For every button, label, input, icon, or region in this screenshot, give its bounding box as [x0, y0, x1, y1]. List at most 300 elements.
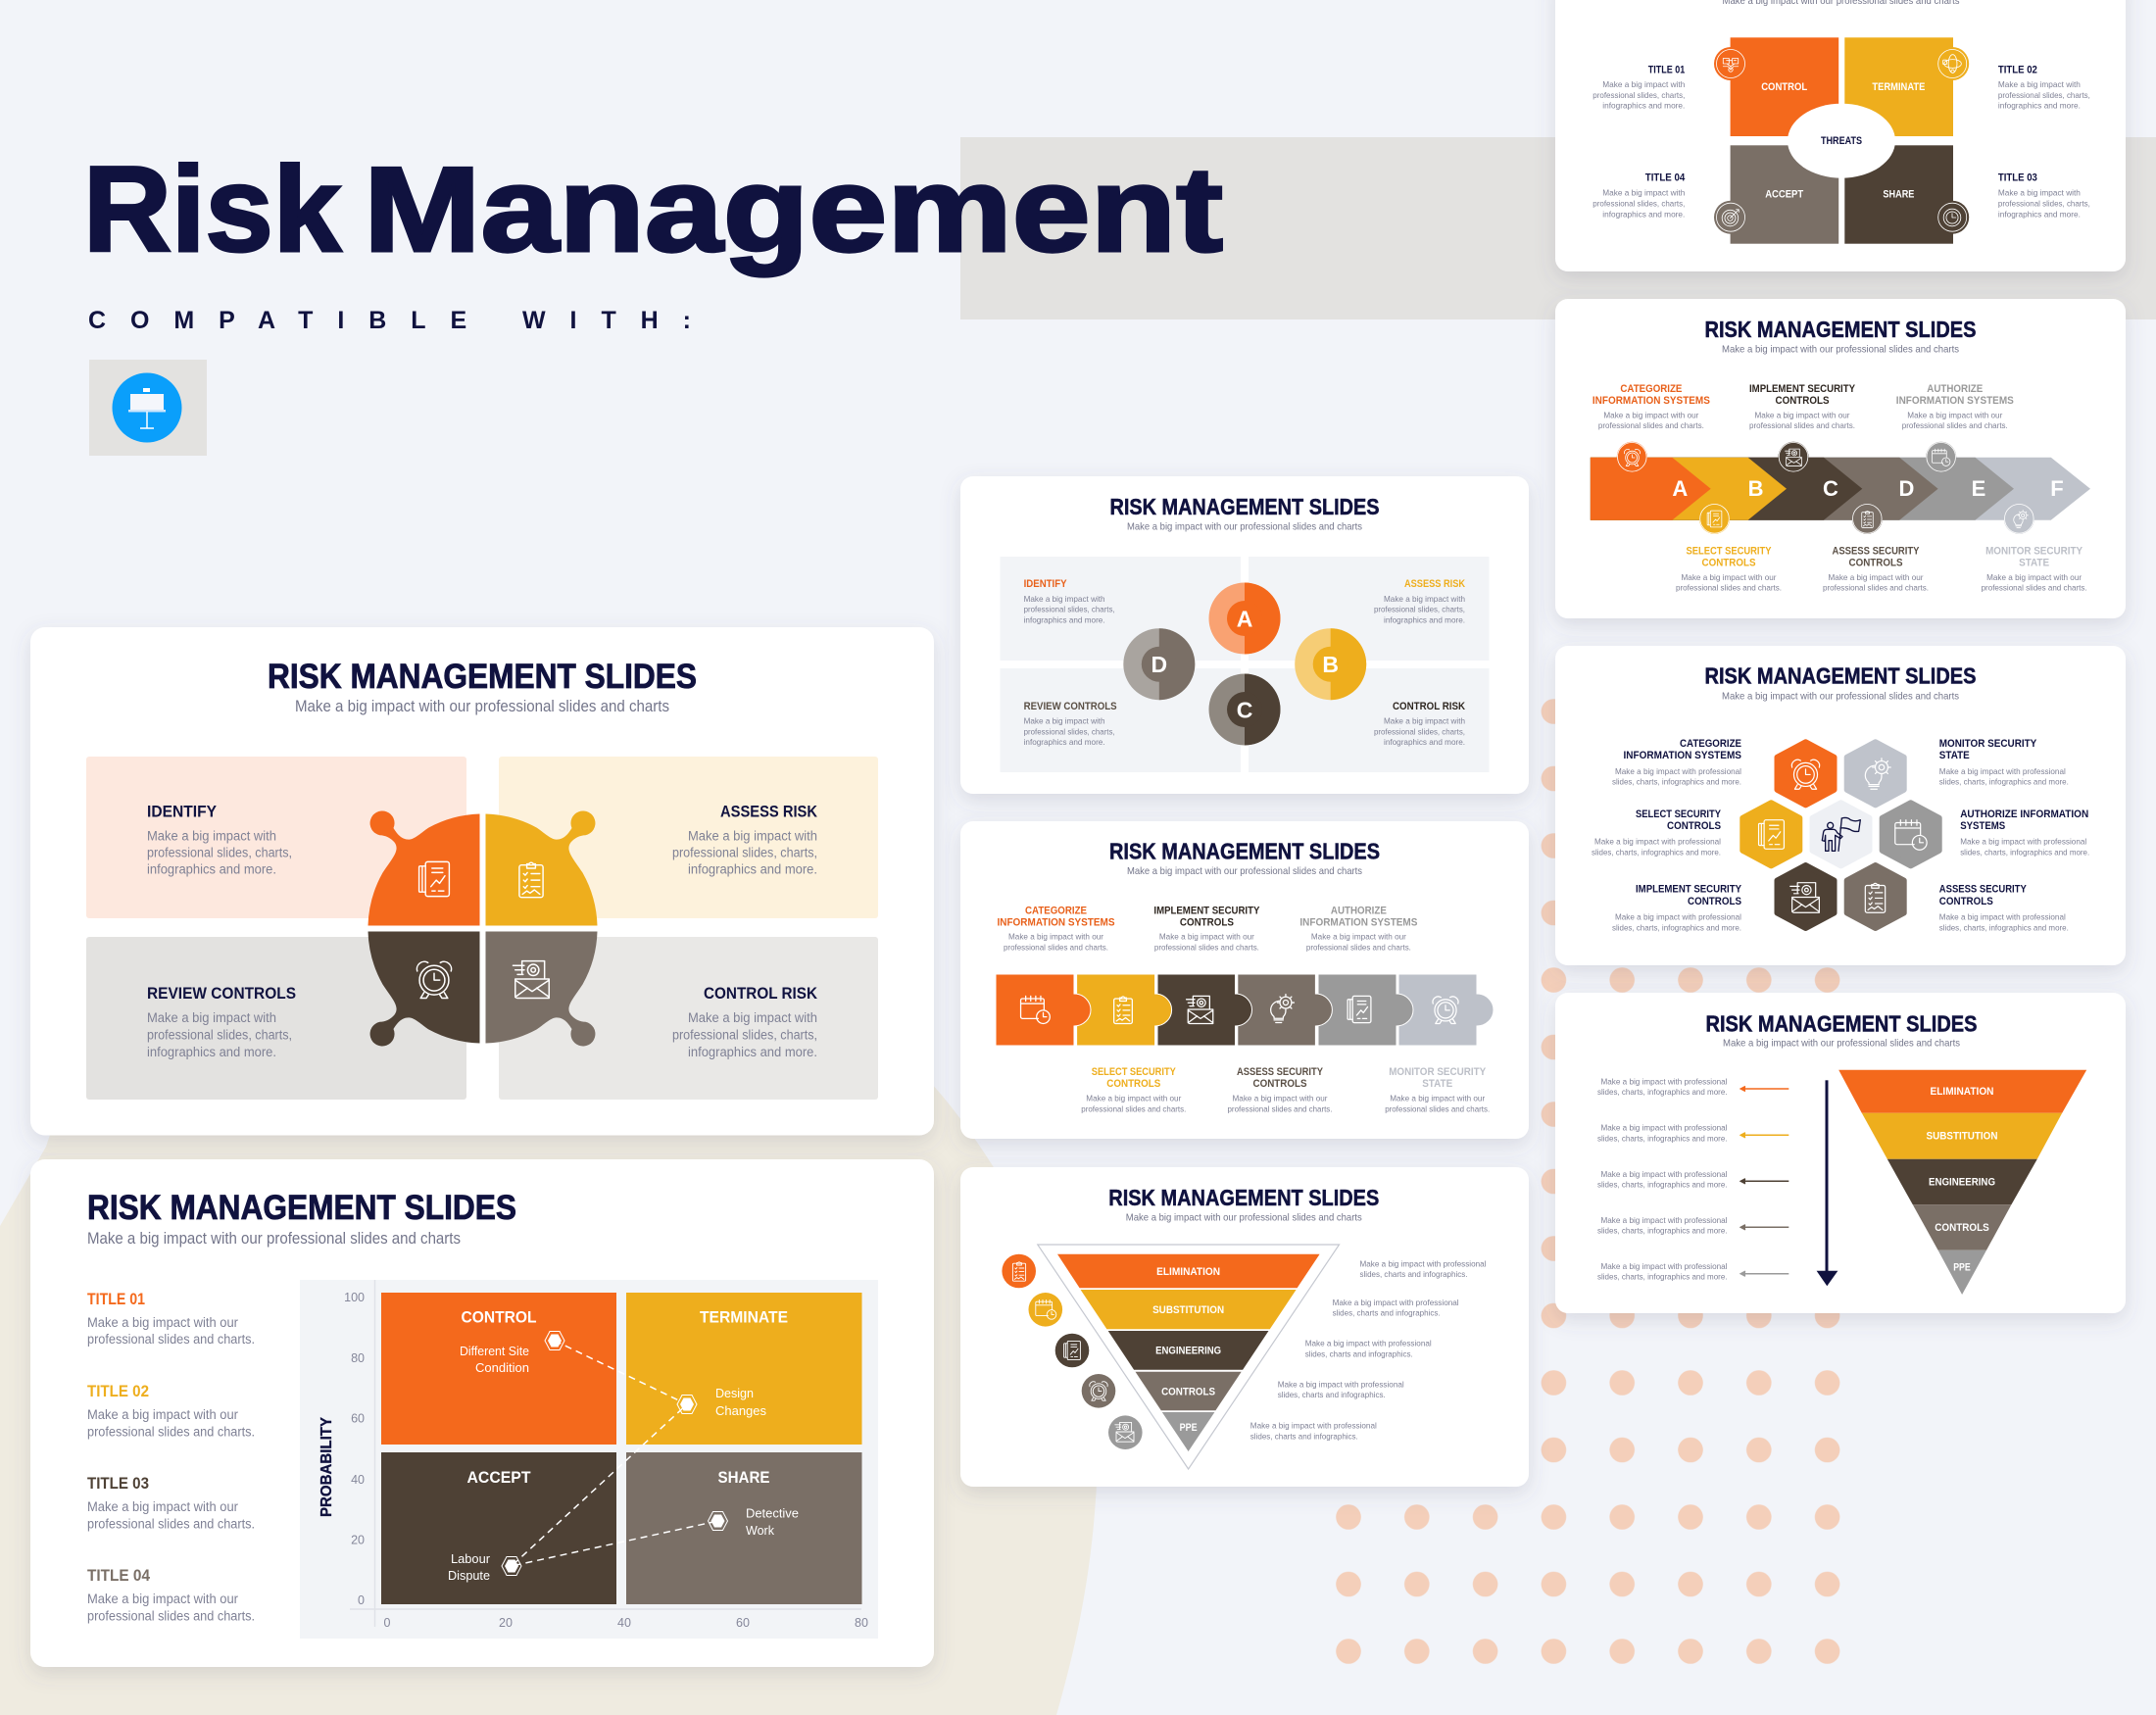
side text 1 with arrow: Make a big impact with professional	[1601, 1076, 1728, 1086]
side text 1 with arrow: slides, charts, infographics and more.	[1597, 1087, 1727, 1097]
icon: globe badge	[1936, 47, 1969, 80]
side text 1 with arrow	[1597, 1076, 1788, 1097]
step text: categorize: Make a big impact with our	[1008, 932, 1103, 942]
step text: categorize: CATEGORIZE	[1025, 905, 1087, 916]
box: identify	[86, 757, 466, 918]
side text 1: slides, charts and infographics.	[1360, 1269, 1468, 1279]
step text: monitor: professional slides and charts.	[1982, 583, 2087, 593]
chevron arrow chain: E	[1972, 476, 1985, 501]
chart: probability matrix	[300, 1280, 878, 1639]
step text: assess: CONTROLS	[1252, 1078, 1307, 1090]
side text 5: Make a big impact with professional	[1250, 1421, 1377, 1431]
text block: select: SELECT SECURITY	[1636, 808, 1722, 820]
text block: title 01: Make a big impact with	[1602, 79, 1686, 89]
card background	[960, 476, 1529, 794]
threats diagram: ACCEPT	[1765, 189, 1803, 201]
step text: select: Make a big impact with our	[1682, 572, 1777, 582]
text block: title 04	[1592, 172, 1686, 219]
icon: calendar badge	[1926, 442, 1956, 472]
list item: title 04: professional slides and charts.	[87, 1609, 255, 1623]
text block: assess risk: professional slides, charts,	[672, 845, 817, 860]
step text: monitor: STATE	[1422, 1078, 1452, 1090]
step text: categorize: INFORMATION SYSTEMS	[1592, 395, 1710, 407]
step text: authorize: Make a big impact with our	[1907, 410, 2002, 419]
box: review controls	[86, 937, 466, 1100]
list item: title 02	[87, 1382, 255, 1439]
icon: clipboard badge	[1852, 504, 1883, 534]
step text: categorize: Make a big impact with our	[1603, 410, 1699, 419]
circle A: A	[1237, 606, 1252, 631]
text block: review controls: professional slides, charts,	[147, 1027, 292, 1043]
step text: implement	[1153, 905, 1260, 952]
main title	[83, 143, 1223, 277]
step text: assess: Make a big impact with our	[1829, 572, 1924, 582]
step text: implement: CONTROLS	[1776, 395, 1829, 407]
panel: quadrant risk process	[30, 627, 934, 1135]
text block: title 02: professional slides, charts,	[1998, 90, 2090, 100]
step text: monitor: professional slides and charts.	[1385, 1103, 1490, 1113]
step text: categorize: CATEGORIZE	[1620, 383, 1682, 395]
step text: categorize: professional slides and charts.	[1598, 420, 1704, 430]
text block: control risk: Make a big impact with	[688, 1010, 817, 1025]
chart: probability matrix: 0	[358, 1593, 365, 1607]
text block: title 02: TITLE 02	[1998, 64, 2037, 75]
side text 4: Make a big impact with professional	[1278, 1379, 1404, 1389]
heading: RISK MANAGEMENT SLIDES	[268, 658, 697, 696]
heading: RISK MANAGEMENT SLIDES	[1705, 1010, 1978, 1036]
list item: title 04: Make a big impact with our	[87, 1592, 238, 1606]
chart: probability matrix: 40	[617, 1616, 631, 1630]
text block: implement	[1612, 884, 1742, 932]
step text: select	[1081, 1066, 1186, 1113]
threats diagram: TERMINATE	[1872, 81, 1925, 93]
icon: keynote badge	[89, 360, 207, 456]
step text: assess: professional slides and charts.	[1227, 1103, 1333, 1113]
text block: title 01	[1592, 64, 1686, 111]
heading: RISK MANAGEMENT SLIDES	[1109, 494, 1380, 519]
text block: review controls: Make a big impact with	[147, 1010, 276, 1025]
chart: probability matrix: PROBABILITY	[318, 1416, 335, 1517]
list item: title 04	[87, 1566, 255, 1623]
panel: probability matrix	[30, 1159, 934, 1667]
heading: RISK MANAGEMENT SLIDES	[1109, 839, 1380, 864]
chart: probability matrix: Dispute	[448, 1568, 490, 1583]
chevron arrow chain: F	[2050, 476, 2064, 501]
background band: grey	[960, 137, 2156, 319]
step text: select: SELECT SECURITY	[1686, 546, 1772, 558]
subheading: Make a big impact with our professional slides and charts	[1722, 690, 1959, 702]
text block: identify: IDENTIFY	[147, 802, 218, 821]
chart: probability matrix: 20	[499, 1616, 513, 1630]
text block: control risk	[1374, 701, 1465, 747]
inverted triangle diagram: ELIMINATION	[1156, 1266, 1220, 1278]
step text: implement: CONTROLS	[1180, 916, 1234, 928]
step text: categorize: professional slides and charts.	[1004, 942, 1108, 952]
icon: report badge	[1699, 504, 1730, 534]
chevron arrow chain: B	[1748, 476, 1764, 501]
side text 5: slides, charts and infographics.	[1250, 1431, 1358, 1441]
card background	[960, 821, 1529, 1139]
list item: title 04: TITLE 04	[87, 1566, 150, 1585]
text block: assess	[1939, 884, 2069, 932]
text block: title 03: Make a big impact with	[1998, 188, 2081, 198]
inverted triangle diagram: PPE	[1953, 1262, 1971, 1274]
icon: calendar badge	[1029, 1293, 1062, 1327]
step text: select: CONTROLS	[1701, 558, 1756, 569]
icon: bulb badge	[2004, 504, 2034, 534]
text block: categorize	[1612, 738, 1741, 787]
subheading: Make a big impact with our professional slides and charts	[87, 1229, 461, 1248]
chart: probability matrix: 100	[344, 1291, 365, 1304]
text block: authorize	[1960, 808, 2089, 857]
step text: authorize: INFORMATION SYSTEMS	[1896, 395, 2014, 407]
step text: categorize	[1592, 383, 1710, 430]
threats diagram: THREATS	[1821, 135, 1862, 147]
step text: implement: IMPLEMENT SECURITY	[1153, 905, 1260, 916]
chart: probability matrix: 0	[384, 1616, 391, 1630]
step text: monitor: Make a big impact with our	[1390, 1094, 1485, 1103]
arrow: vertical down	[1817, 1080, 1838, 1286]
circle B: B	[1322, 652, 1339, 677]
text block: assess risk: infographics and more.	[688, 862, 817, 876]
step text: categorize: INFORMATION SYSTEMS	[998, 916, 1115, 928]
text block: review controls: REVIEW CONTROLS	[1024, 701, 1117, 712]
text block: review controls	[1024, 701, 1117, 747]
side text 5 with arrow: slides, charts, infographics and more.	[1597, 1272, 1727, 1282]
step text: assess: ASSESS SECURITY	[1237, 1066, 1324, 1078]
step text: assess	[1823, 546, 1929, 593]
text block: assess risk: Make a big impact with	[688, 829, 817, 843]
step text: monitor	[1982, 546, 2087, 593]
chevron arrow chain: D	[1899, 476, 1914, 501]
text block: control risk: professional slides, charts,	[1374, 726, 1465, 736]
side text 5 with arrow	[1597, 1261, 1788, 1282]
side text 4 with arrow: slides, charts, infographics and more.	[1597, 1226, 1727, 1236]
text block: select: CONTROLS	[1667, 820, 1721, 832]
chart: probability matrix: 80	[351, 1351, 365, 1365]
text block: control risk: CONTROL RISK	[704, 984, 818, 1003]
inverted triangle diagram: SUBSTITUTION	[1152, 1304, 1224, 1316]
step text: monitor	[1385, 1066, 1490, 1113]
text block: assess: Make a big impact with professional	[1939, 912, 2066, 922]
background dot grid	[1314, 678, 1863, 1685]
text block: monitor: STATE	[1939, 750, 1970, 761]
side text 3 with arrow	[1597, 1169, 1788, 1190]
chart: probability matrix: Design	[715, 1386, 754, 1400]
side text 3 with arrow: Make a big impact with professional	[1601, 1169, 1728, 1179]
inverted triangle diagram	[1038, 1245, 1339, 1469]
step text: assess: professional slides and charts.	[1823, 583, 1929, 593]
chart: probability matrix: Different Site	[460, 1344, 529, 1358]
list item: title 03	[87, 1474, 255, 1531]
side text 3: slides, charts and infographics.	[1305, 1348, 1413, 1358]
chevron arrow chain	[1591, 458, 2090, 520]
side text 2: Make a big impact with professional	[1333, 1298, 1459, 1307]
step text: authorize: AUTHORIZE	[1927, 383, 1983, 395]
chart: probability matrix: Changes	[715, 1403, 766, 1418]
text block: title 03: TITLE 03	[1998, 172, 2037, 184]
text block: assess risk: ASSESS RISK	[1404, 578, 1465, 590]
card background	[1555, 646, 2126, 965]
text block: assess risk: Make a big impact with	[1384, 594, 1465, 604]
text block: identify: Make a big impact with	[147, 829, 276, 843]
text block: implement: slides, charts, infographics and more.	[1612, 922, 1741, 932]
step text: monitor: MONITOR SECURITY	[1389, 1066, 1487, 1078]
chart: probability matrix: 80	[855, 1616, 868, 1630]
chart: probability matrix: SHARE	[717, 1468, 770, 1487]
heading: RISK MANAGEMENT SLIDES	[87, 1189, 516, 1227]
side text 3: Make a big impact with professional	[1305, 1339, 1432, 1348]
panel: threats quadrants	[1555, 0, 2126, 271]
chevron arrow chain: A	[1672, 476, 1688, 501]
threats diagram: CONTROL	[1761, 81, 1807, 93]
panel: chevron steps	[1555, 299, 2126, 618]
side text 2 with arrow: Make a big impact with professional	[1601, 1123, 1728, 1133]
text block: authorize: AUTHORIZE INFORMATION	[1960, 808, 2088, 820]
background blob: beige	[0, 882, 1097, 1715]
text block: title 04: TITLE 04	[1645, 172, 1686, 184]
text block: title 03: infographics and more.	[1998, 209, 2081, 219]
text block: implement: IMPLEMENT SECURITY	[1636, 884, 1742, 896]
step text: implement	[1749, 383, 1856, 430]
text block: control risk: professional slides, charts,	[672, 1027, 817, 1043]
text block: title 03	[1998, 172, 2090, 219]
step text: authorize: professional slides and charts.	[1902, 420, 2008, 430]
text block: select	[1592, 808, 1722, 857]
text block: review controls	[147, 984, 296, 1059]
icon: clipboard badge	[1002, 1254, 1036, 1288]
box: assess risk	[499, 757, 878, 918]
circle B	[1295, 628, 1366, 700]
step text: monitor: Make a big impact with our	[1986, 572, 2082, 582]
step text: select	[1676, 546, 1782, 593]
side text 2	[1333, 1298, 1459, 1318]
step text: select: professional slides and charts.	[1676, 583, 1782, 593]
card background	[1555, 993, 2126, 1313]
step text: authorize: INFORMATION SYSTEMS	[1299, 916, 1417, 928]
card background	[1555, 0, 2126, 271]
chart: probability matrix: 60	[351, 1411, 365, 1425]
inverted triangle diagram	[1838, 1070, 2086, 1295]
text block: title 02	[1998, 64, 2090, 111]
text block: identify	[147, 802, 292, 876]
box: control risk	[499, 937, 878, 1100]
icon: clock badge	[1617, 442, 1647, 472]
card background	[1555, 299, 2126, 618]
central knobbed circle	[368, 810, 598, 1047]
side text 4	[1278, 1379, 1404, 1399]
text block: monitor	[1939, 738, 2069, 787]
inverted triangle diagram: CONTROLS	[1161, 1386, 1215, 1397]
text block: select: Make a big impact with professional	[1594, 837, 1721, 847]
inverted triangle diagram: ENGINEERING	[1929, 1176, 1995, 1188]
text block: control risk: CONTROL RISK	[1393, 701, 1465, 712]
subheading: Make a big impact with our professional slides and charts	[1126, 1212, 1362, 1224]
list item: title 01: professional slides and charts.	[87, 1332, 255, 1347]
subheading: Make a big impact with our professional slides and charts	[1723, 1037, 1960, 1049]
text block: assess risk: professional slides, charts,	[1374, 605, 1465, 614]
chart: probability matrix: Work	[746, 1523, 774, 1538]
chart: probability matrix: 60	[736, 1616, 750, 1630]
text block: assess risk	[672, 802, 818, 876]
text block: identify: professional slides, charts,	[1024, 605, 1115, 614]
side text 3 with arrow: slides, charts, infographics and more.	[1597, 1180, 1727, 1190]
text block: title 01: TITLE 01	[1648, 64, 1685, 75]
list item: title 03: Make a big impact with our	[87, 1499, 238, 1514]
text block: monitor: Make a big impact with professional	[1939, 766, 2066, 776]
main title: Risk	[83, 143, 342, 277]
side text 4: slides, charts and infographics.	[1278, 1390, 1386, 1399]
side text 4 with arrow	[1597, 1215, 1788, 1236]
text block: monitor: MONITOR SECURITY	[1939, 738, 2037, 750]
subheading: Make a big impact with our professional slides and charts	[1722, 343, 1959, 355]
threats diagram	[1731, 37, 1953, 244]
list item: title 03: professional slides and charts.	[87, 1517, 255, 1531]
list item: title 02: TITLE 02	[87, 1382, 149, 1400]
chart: probability matrix: ACCEPT	[466, 1468, 531, 1487]
threats diagram: SHARE	[1883, 189, 1914, 201]
inverted triangle diagram: SUBSTITUTION	[1927, 1130, 1998, 1142]
side text 1	[1360, 1258, 1487, 1279]
icon: deal badge	[1714, 47, 1747, 80]
text block: title 01: professional slides, charts,	[1592, 90, 1685, 100]
inverted triangle diagram: PPE	[1180, 1422, 1198, 1434]
text block: identify: infographics and more.	[1024, 614, 1105, 624]
side text 2: slides, charts and infographics.	[1333, 1308, 1441, 1318]
circle D: D	[1151, 652, 1167, 677]
icon: mail badge	[1778, 442, 1809, 472]
list item: title 01: Make a big impact with our	[87, 1315, 238, 1330]
text block: authorize: Make a big impact with professional	[1960, 837, 2086, 847]
text block: assess risk: infographics and more.	[1384, 614, 1465, 624]
text block: select: slides, charts, infographics and more.	[1592, 847, 1721, 857]
inverted triangle diagram: ENGINEERING	[1155, 1346, 1221, 1357]
icon: target badge	[1714, 201, 1747, 234]
step text: authorize: professional slides and charts.	[1306, 942, 1411, 952]
boxes	[1000, 557, 1490, 772]
step text: assess: ASSESS SECURITY	[1833, 546, 1920, 558]
step text: implement: Make a big impact with our	[1159, 932, 1254, 942]
text block: assess: ASSESS SECURITY	[1939, 884, 2027, 896]
text block: review controls: Make a big impact with	[1024, 716, 1105, 726]
heading: RISK MANAGEMENT SLIDES	[1705, 317, 1976, 342]
step text: categorize	[998, 905, 1115, 952]
text block: assess risk: ASSESS RISK	[720, 802, 818, 821]
text block: control risk: infographics and more.	[1384, 737, 1465, 747]
text block: identify: infographics and more.	[147, 862, 276, 876]
chart: probability matrix: Labour	[451, 1551, 491, 1566]
text block: categorize: slides, charts, infographics and more.	[1612, 777, 1741, 787]
compatible with label: COMPATIBLE WITH:	[88, 307, 691, 334]
list item: title 01: TITLE 01	[87, 1290, 145, 1308]
card background	[30, 627, 934, 1135]
text block: implement: Make a big impact with professional	[1615, 912, 1741, 922]
step text: authorize	[1299, 905, 1417, 952]
step text: assess: Make a big impact with our	[1233, 1094, 1328, 1103]
chart: probability matrix: Detective	[746, 1505, 799, 1521]
step text: implement: IMPLEMENT SECURITY	[1749, 383, 1856, 395]
text block: control risk: Make a big impact with	[1384, 716, 1465, 726]
step text: select: professional slides and charts.	[1081, 1103, 1186, 1113]
chart: probability matrix: CONTROL	[461, 1307, 537, 1327]
panel: hierarchy funnel with arrows	[1555, 993, 2126, 1313]
text block: title 04: professional slides, charts,	[1592, 199, 1685, 209]
side text 2 with arrow	[1597, 1123, 1788, 1143]
side text 3	[1305, 1339, 1432, 1358]
text block: assess risk	[1374, 578, 1465, 624]
text block: identify: professional slides, charts,	[147, 845, 292, 860]
list item: title 01	[87, 1290, 255, 1347]
step text: select: Make a big impact with our	[1086, 1094, 1181, 1103]
step text: authorize: AUTHORIZE	[1331, 905, 1387, 916]
text block: authorize: slides, charts, infographics and more.	[1960, 847, 2089, 857]
text block: identify: Make a big impact with	[1024, 594, 1105, 604]
side text 2 with arrow: slides, charts, infographics and more.	[1597, 1133, 1727, 1143]
circle A	[1209, 582, 1280, 655]
step text: select: CONTROLS	[1106, 1078, 1160, 1090]
text block: title 02: infographics and more.	[1998, 101, 2081, 111]
step text: implement: Make a big impact with our	[1754, 410, 1850, 419]
text block: title 04: infographics and more.	[1602, 209, 1685, 219]
side text 1: Make a big impact with professional	[1360, 1258, 1487, 1268]
step text: monitor: MONITOR SECURITY	[1985, 546, 2083, 558]
chart: probability matrix: 40	[351, 1473, 365, 1487]
inverted triangle diagram: ELIMINATION	[1931, 1086, 1994, 1098]
panel: hexagon cluster	[1555, 646, 2126, 965]
chart: probability matrix: Condition	[475, 1360, 529, 1375]
side text 5 with arrow: Make a big impact with professional	[1601, 1261, 1728, 1271]
circle C: C	[1237, 698, 1252, 723]
panel: puzzle steps	[960, 821, 1529, 1139]
card background	[960, 1167, 1529, 1487]
subheading: Make a big impact with our professional slides and charts	[1127, 865, 1362, 877]
side text 4 with arrow: Make a big impact with professional	[1601, 1215, 1728, 1225]
puzzle chain	[996, 974, 1494, 1046]
heading: RISK MANAGEMENT SLIDES	[1108, 1185, 1379, 1210]
step text: authorize	[1896, 383, 2014, 430]
text block: control risk	[672, 984, 818, 1059]
text block: review controls: infographics and more.	[1024, 737, 1105, 747]
text block: review controls: infographics and more.	[147, 1045, 276, 1059]
icon: clock badge	[1082, 1374, 1115, 1408]
subheading: Make a big impact with our professional slides and charts	[295, 697, 669, 715]
side text 5	[1250, 1421, 1377, 1441]
icon: timer badge	[1936, 201, 1969, 234]
text block: categorize: CATEGORIZE	[1680, 738, 1741, 750]
chart: probability matrix: TERMINATE	[700, 1307, 788, 1327]
list item: title 03: TITLE 03	[87, 1474, 149, 1493]
circle D	[1123, 628, 1195, 700]
chevron arrow chain: C	[1823, 476, 1838, 501]
text block: monitor: slides, charts, infographics and more.	[1939, 777, 2069, 787]
main title: Management	[364, 143, 1223, 277]
circle C	[1209, 674, 1280, 745]
text block: title 03: professional slides, charts,	[1998, 199, 2090, 209]
step text: assess: CONTROLS	[1848, 558, 1903, 569]
text block: categorize: Make a big impact with professional	[1615, 766, 1741, 776]
text block: identify: IDENTIFY	[1024, 578, 1067, 590]
text block: identify	[1024, 578, 1115, 624]
list item: title 02: Make a big impact with our	[87, 1407, 238, 1422]
text block: review controls: REVIEW CONTROLS	[147, 984, 296, 1003]
step text: select: SELECT SECURITY	[1092, 1066, 1176, 1078]
text block: control risk: infographics and more.	[688, 1045, 817, 1059]
card background	[30, 1159, 934, 1667]
list item: title 02: professional slides and charts.	[87, 1425, 255, 1439]
inverted triangle diagram: CONTROLS	[1935, 1222, 1989, 1234]
text block: title 01: infographics and more.	[1602, 101, 1685, 111]
step text: implement: professional slides and charts.	[1749, 420, 1855, 430]
